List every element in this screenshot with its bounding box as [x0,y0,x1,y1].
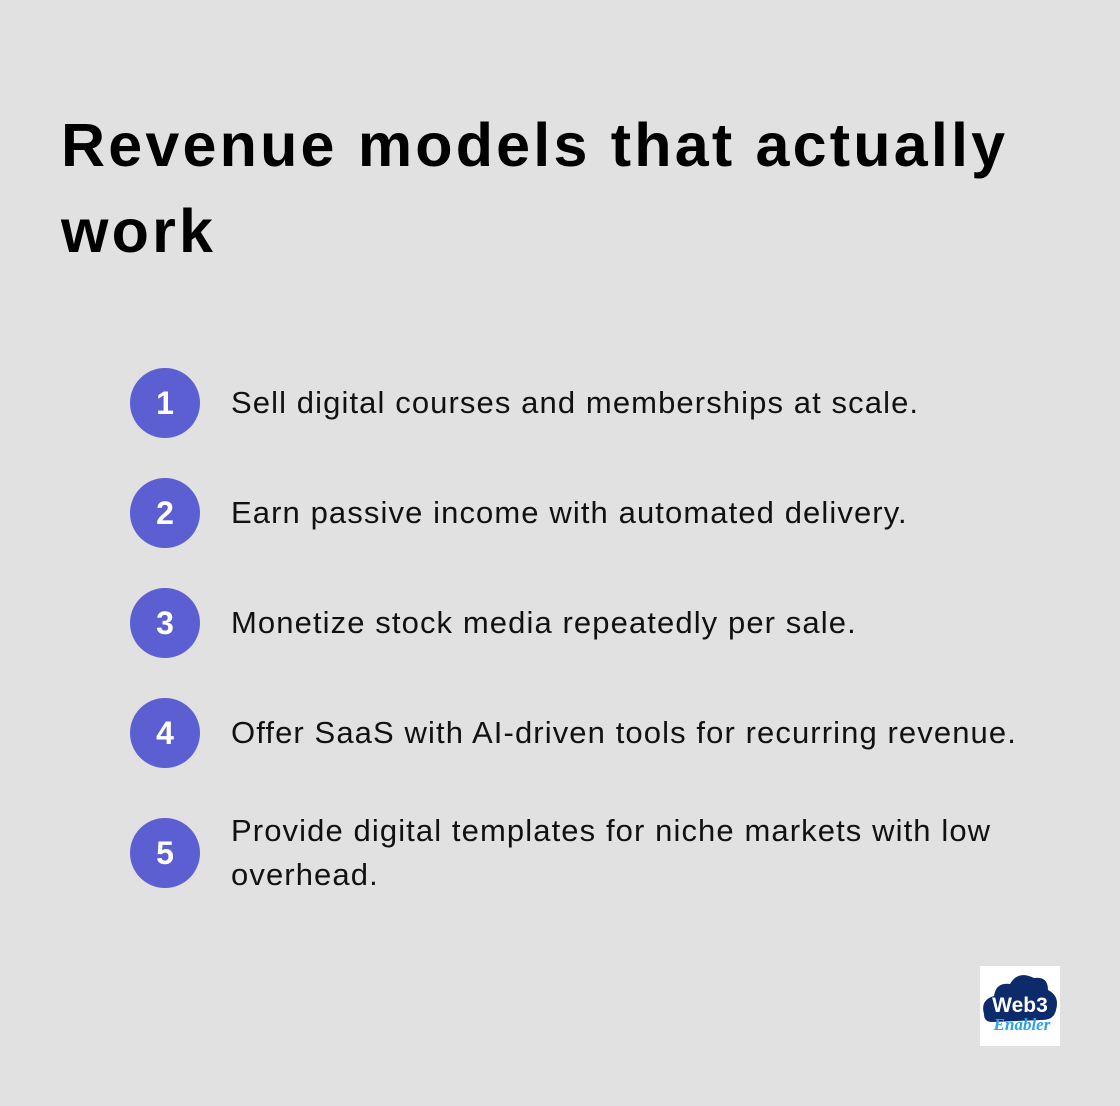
item 5: 5 [156,835,174,871]
title [60,111,1008,265]
logo: Enabler [993,1015,1051,1034]
title: work [61,197,216,265]
item 4: 4 [156,715,174,751]
item 3: Monetize stock media repeatedly per sale. [231,605,857,640]
item 3: 3 [156,605,174,641]
item 2: 2 [156,495,174,531]
item 4: Offer SaaS with AI-driven tools for recurring revenue. [231,715,1017,750]
item 1: Sell digital courses and memberships at scale. [231,385,919,420]
item 1: 1 [156,385,174,421]
item 5: Provide digital templates for niche markets with low overhead. [231,813,991,892]
title: Revenue models that actually [61,111,1008,179]
logo: Web3 [992,994,1048,1017]
item 3 [130,588,857,658]
item 2: Earn passive income with automated delivery. [231,495,908,530]
item 2 [130,478,908,548]
item 1 [130,368,919,438]
logo [980,966,1060,1046]
item 4 [130,698,1017,768]
